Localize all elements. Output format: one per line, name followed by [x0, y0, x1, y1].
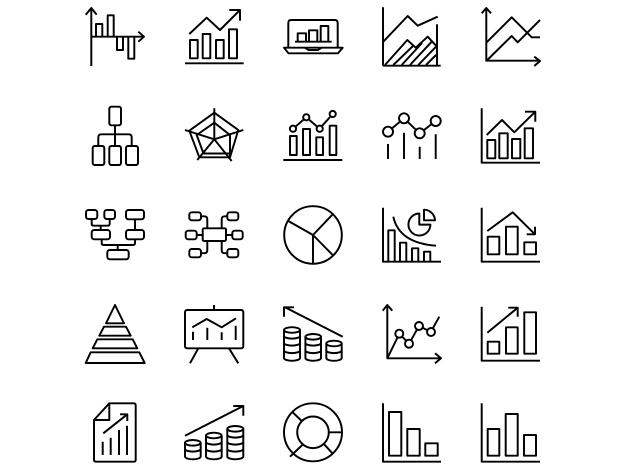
icon: report document — [94, 403, 136, 462]
icon: crossing line chart — [482, 8, 540, 66]
icon: three bar chart — [482, 403, 540, 462]
icon: bars with dotted line — [283, 111, 342, 160]
icon: coins with falling arrow — [284, 307, 343, 361]
icon: mind map — [186, 212, 243, 257]
icon: rising bars with arrow — [482, 307, 540, 361]
icon: bar chart with rising arrow — [185, 10, 244, 63]
icon: lollipop line chart — [383, 113, 441, 159]
icon: organisation tree — [93, 107, 138, 165]
icon: laptop with bar chart — [284, 20, 343, 53]
icon: hatched area chart — [383, 7, 441, 66]
icon: dotted line chart with axes — [383, 305, 441, 363]
icon: radar chart — [185, 108, 243, 161]
icon: bars with curve and pie — [383, 208, 441, 262]
icon: pyramid — [86, 305, 145, 363]
icon: presentation board — [185, 305, 243, 363]
icon: bars with falling arrow — [482, 208, 540, 262]
icon: positive and negative bar chart — [86, 8, 144, 66]
icon: pie chart — [284, 206, 342, 264]
icon: bars with trend arrow — [482, 108, 540, 163]
icon: merging flow diagram — [86, 210, 144, 259]
icon: donut chart — [284, 403, 342, 461]
icon: coins with rising arrow — [185, 406, 243, 459]
icon: descending bar chart — [383, 403, 441, 462]
